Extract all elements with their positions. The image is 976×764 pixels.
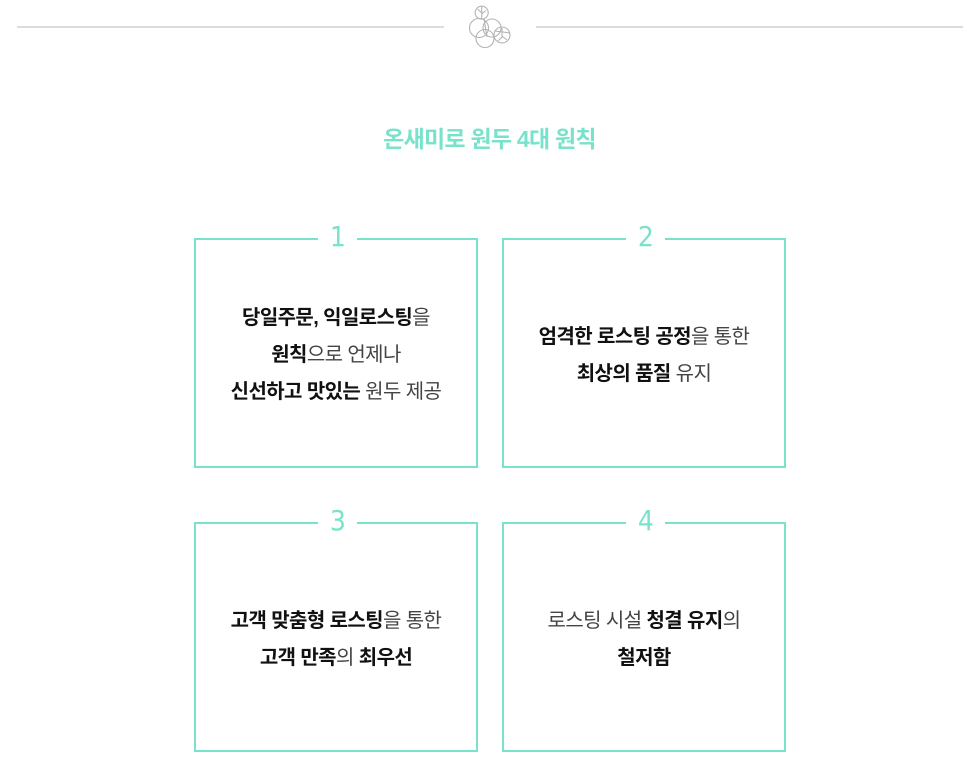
number 1 [318,220,357,254]
text: principle 3 [231,610,442,669]
text: principle 2: 엄격한 로스팅 공정을 통한 [539,326,749,348]
panel: principle 1 [194,238,478,468]
number 3: 3 [329,504,346,537]
text: principle 3: 고객 만족의 최우선 [260,647,412,669]
divider left [17,26,444,28]
number 2: 2 [637,220,654,253]
text: principle 1: 당일주문, 익일로스팅을 [242,307,430,329]
panel: principle 4 [502,522,786,752]
text: principle 1: 원칙으로 언제나 [271,344,401,366]
title: 온새미로 원두 4대 원칙 [383,126,596,152]
number 4: 4 [637,504,654,537]
text: principle 2 [539,326,750,385]
number 2 [626,220,665,254]
number 1: 1 [329,220,346,253]
text: principle 4 [548,610,740,669]
icon: circles logo [469,6,510,48]
panel: principle 2 [502,238,786,468]
text: principle 4: 철저함 [617,647,671,669]
divider right [536,26,963,28]
text: principle 1: 신선하고 맛있는 원두 제공 [231,381,441,403]
number 4 [626,504,665,538]
text: principle 2: 최상의 품질 유지 [577,363,711,385]
text: principle 1 [231,307,441,403]
text: principle 3: 고객 맞춤형 로스팅을 통한 [231,610,441,632]
text: principle 4: 로스팅 시설 청결 유지의 [548,610,740,632]
number 3 [318,504,357,538]
panel: principle 3 [194,522,478,752]
